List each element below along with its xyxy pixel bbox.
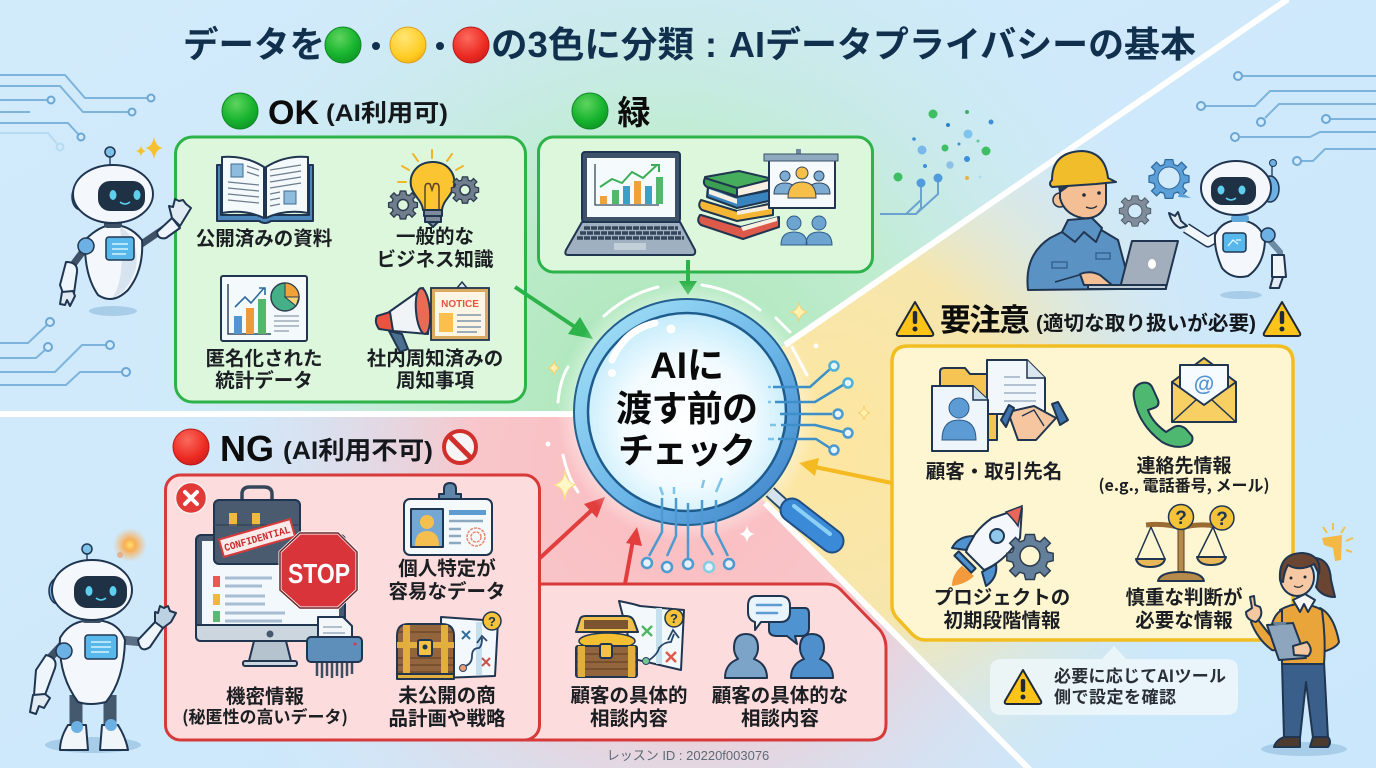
panel: NG list: 容易なデータ: [388, 575, 506, 604]
icon: treasure chest and map: ?: [488, 614, 496, 629]
panel: NG list: 品計画や戦略: [388, 702, 506, 731]
title: データを: [183, 24, 325, 65]
icon: treasure chest open and map: ?: [670, 611, 678, 626]
circuit lines: top left: [0, 75, 154, 150]
woman with clipboard: [1246, 523, 1353, 756]
panel: NG heading: (AI利用不可): [283, 437, 433, 465]
panel: OK list: [176, 137, 526, 402]
panel: OK list: 周知事項: [396, 364, 474, 393]
lesson ID footer: レッスン ID : 20220f003076: [607, 748, 769, 763]
title: AIデータプライバシーの基本: [729, 24, 1196, 65]
panel: NG heading: NG: [220, 428, 274, 469]
text: caution items: 顧客・取引先名: [926, 455, 1062, 484]
panel: caution list: プロジェクトの: [934, 581, 1070, 610]
icon: treasure chest and map: [397, 612, 501, 679]
icon: megaphone and notice board: [376, 282, 489, 352]
icon: confidential monitor, briefcase, stop sign, shredder: CONFIDENTIAL: [223, 525, 292, 555]
robot: NG pointing: [30, 528, 176, 753]
panel: OK heading: OK: [268, 94, 319, 132]
text: check heading: [616, 345, 758, 471]
panel: caution heading: 要注意: [940, 303, 1030, 338]
panel: NG list: 相談内容: [741, 702, 819, 731]
panel: OK list: ビジネス知識: [376, 243, 494, 272]
panel: NG list: 未公開の商: [398, 679, 496, 708]
callout: check AI tool settings: [990, 646, 1238, 715]
title: [183, 24, 1196, 65]
text: OK items: 公開済みの資料: [196, 222, 333, 251]
callout: check AI tool settings: 側で設定を確認: [1054, 683, 1176, 708]
panel: NG list: 相談内容: [590, 702, 668, 731]
panel: NG list: (秘匿性の高いデータ): [182, 703, 348, 728]
icon: open book: [217, 157, 313, 223]
panel: green heading: 緑: [618, 94, 650, 131]
panel: caution heading: [897, 302, 1300, 338]
panel: caution list: 必要な情報: [1135, 604, 1233, 633]
title: :: [705, 24, 717, 65]
icon: phone and envelope: @: [1194, 373, 1214, 396]
icon: treasure chest open and map: [576, 601, 684, 677]
magnifying glass: AIに渡す前のチェック: [546, 282, 870, 572]
icon: presentation board: [764, 149, 838, 208]
icon: laptop with chart: [565, 152, 695, 255]
callout: check AI tool settings: 必要に応じてAIツール: [1054, 662, 1226, 687]
circuit: bottom: [642, 478, 734, 572]
icon: light bulb and gears: [389, 150, 479, 227]
panel: OK list: 匿名化された: [205, 342, 323, 371]
panel: OK heading: (AI利用可): [326, 100, 448, 127]
text: NG items: 機密情報: [226, 680, 304, 709]
robot: OK waving: [60, 137, 191, 316]
text: check heading: チェック: [618, 430, 756, 471]
panel: caution list: (e.g., 電話番号, メール): [1098, 472, 1270, 496]
panel: caution heading: (適切な取り扱いが必要): [1036, 311, 1256, 335]
icon: balance scale: ?: [1216, 509, 1228, 530]
panel: green heading: [572, 93, 650, 131]
circuit: right: [768, 362, 852, 454]
icon: statistics board: [221, 276, 307, 341]
panel: OK list: 一般的な: [396, 220, 474, 249]
handle: [770, 492, 832, 541]
sparkles: [546, 302, 870, 543]
text: check heading: 渡す前の: [616, 388, 758, 429]
panel: NG heading: [173, 428, 476, 469]
icon: cross badge: [176, 482, 206, 514]
icon: balance scale: [1136, 504, 1234, 581]
icon: documents and handshake: [932, 360, 1068, 451]
panel: caution list: 初期段階情報: [943, 604, 1061, 633]
panel: NG list: 個人特定が: [398, 552, 496, 581]
panel: green examples: [538, 137, 872, 272]
panel: OK heading: [222, 93, 448, 132]
title: の3色に分類: [491, 24, 694, 65]
icon: rocket and gear: [952, 506, 1053, 586]
icon: confidential monitor, briefcase, stop sign, shredder: STOP: [288, 558, 350, 589]
panel: OK list: 社内周知済みの: [367, 342, 503, 371]
gears between engineer and robot: [1119, 160, 1191, 226]
panel: caution list: 連絡先情報: [1136, 451, 1232, 478]
circuit lines: bottom left: [0, 318, 130, 385]
icon: phone and envelope: [1134, 358, 1236, 447]
icon: ID card: [404, 483, 492, 555]
panel: OK list: 統計データ: [215, 364, 313, 393]
panel: caution list: 慎重な判断が: [1125, 581, 1243, 610]
icon: confidential monitor, briefcase, stop sign, shredder: [196, 487, 362, 678]
data particles: [880, 110, 994, 214]
circuit lines: top right: [1197, 72, 1376, 165]
icon: audience: [781, 216, 832, 245]
icon: two people talking: [725, 596, 833, 678]
panel: NG list: [166, 475, 886, 740]
icon: balance scale: ?: [1175, 508, 1187, 529]
engineer with laptop: [1027, 151, 1178, 290]
arrows: to magnifier: [515, 260, 892, 584]
panel: NG list: 顧客の具体的: [570, 679, 688, 708]
text: check heading: AIに: [650, 345, 724, 386]
icon: stack of books: [698, 171, 779, 239]
icon: megaphone and notice board: NOTICE: [441, 299, 479, 310]
panel: caution list: [892, 346, 1293, 640]
robot: collaborating with engineer: [1169, 160, 1286, 299]
icon: prohibited: [444, 431, 476, 463]
panel: NG list: 顧客の具体的な: [712, 679, 848, 708]
